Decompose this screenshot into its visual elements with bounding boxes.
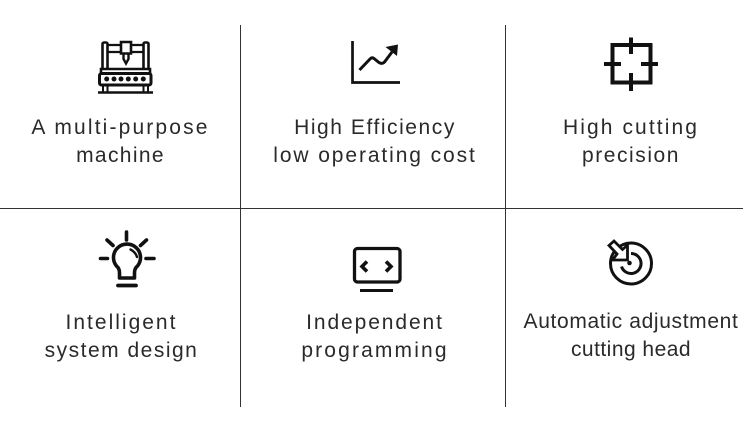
label: independent programming: Independent (306, 311, 444, 334)
label: intelligent system design: system design (45, 339, 198, 362)
label: high efficiency: low operating cost (273, 144, 477, 167)
label: intelligent system design: Intelligent (66, 311, 177, 334)
label: high efficiency (273, 116, 477, 167)
icon: multi-purpose machine (98, 42, 153, 92)
icon: programming monitor (354, 248, 400, 290)
label: multi-purpose machine: machine (76, 144, 165, 167)
label: automatic adjustment cutting head: Automatic adjustment (524, 310, 738, 333)
label: high cutting precision: precision (582, 144, 680, 167)
label: automatic adjustment cutting head: cutting head (571, 338, 691, 361)
label: high cutting precision (563, 116, 699, 167)
label: multi-purpose machine (31, 116, 210, 167)
icon: precision crosshair (604, 38, 658, 91)
label: automatic adjustment cutting head (524, 310, 738, 361)
label: intelligent system design (45, 311, 198, 362)
label: independent programming (301, 311, 449, 362)
label: high efficiency: High Efficiency (294, 116, 456, 139)
label: multi-purpose machine: A multi-purpose (31, 116, 210, 139)
label: high cutting precision: High cutting (563, 116, 699, 139)
icon: adjustment cutting head (609, 241, 652, 284)
icon: rising line chart (352, 41, 400, 82)
label: independent programming: programming (301, 339, 449, 362)
icon: light bulb (100, 232, 154, 286)
